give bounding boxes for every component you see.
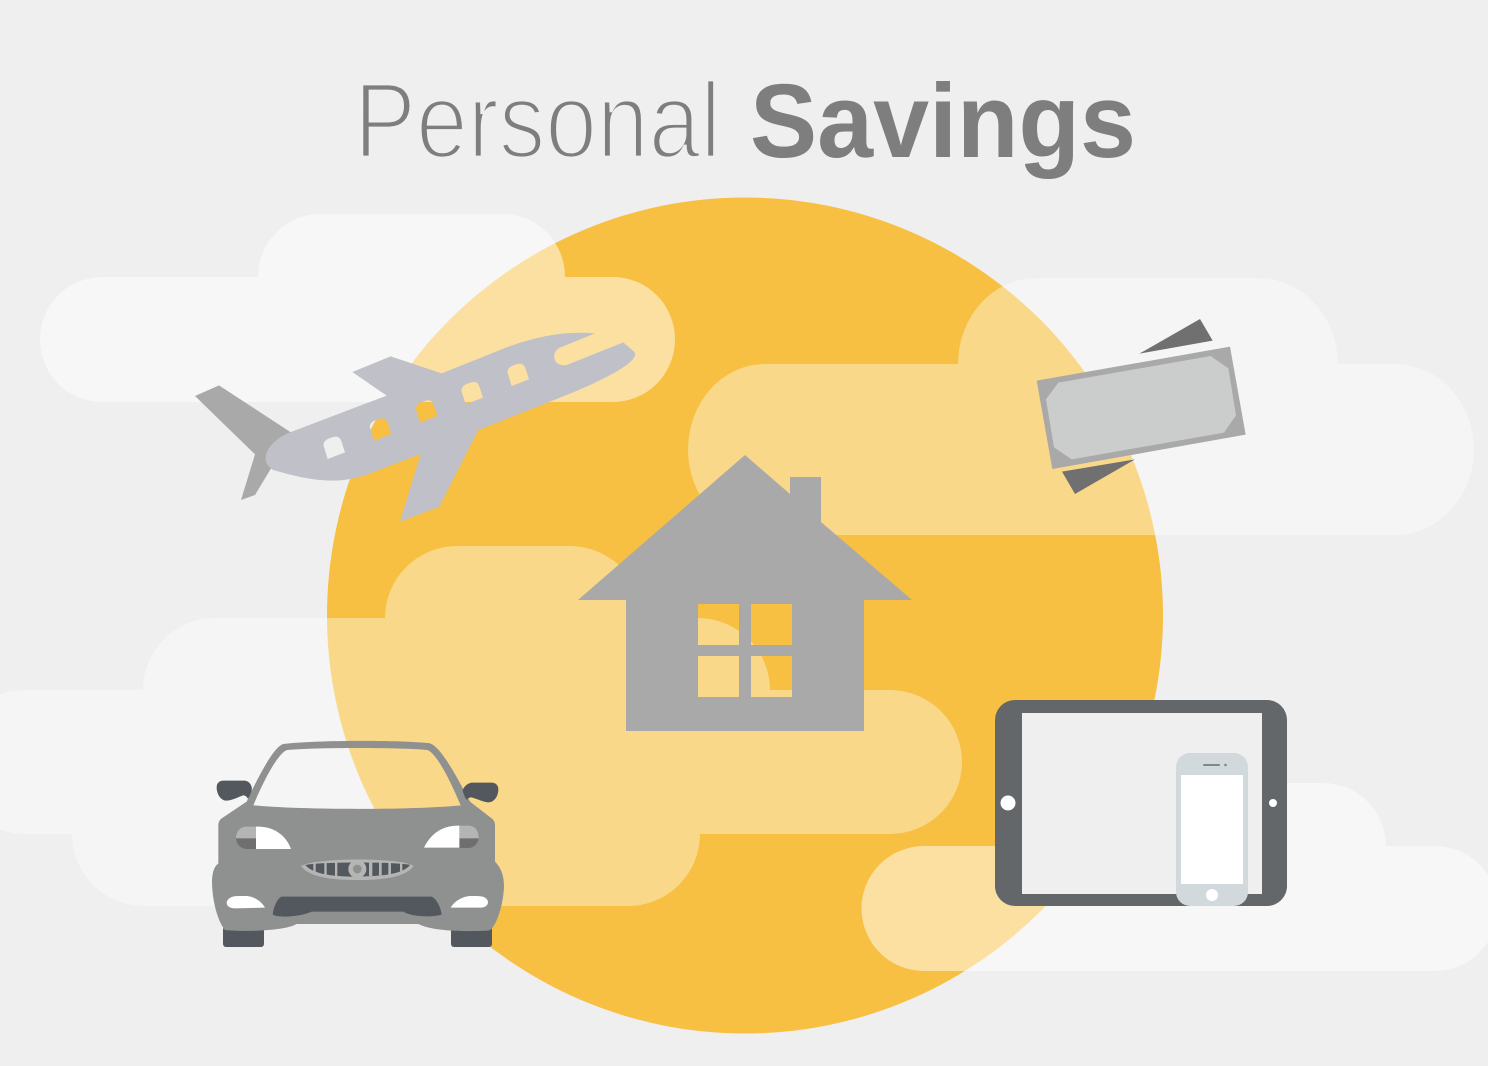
airplane tail [195, 385, 293, 500]
icon: airplane [195, 333, 635, 522]
headlight right [424, 826, 479, 848]
banknote lower triangle [1062, 459, 1135, 494]
phone screen [1181, 775, 1243, 884]
headlight left [236, 827, 291, 849]
sun circle [327, 198, 1163, 1034]
cloud: top left [40, 214, 675, 402]
lower air intake [273, 897, 442, 917]
mirror right [463, 783, 498, 802]
fog lights [227, 896, 488, 908]
icon: house [578, 455, 912, 731]
icon: banknote [1037, 319, 1246, 494]
cloud: lower left [0, 546, 962, 906]
phone home button [1206, 889, 1218, 901]
title: Personal [354, 60, 721, 180]
banknote outer [1037, 347, 1246, 469]
car body [212, 741, 504, 931]
banknote upper triangle [1139, 319, 1213, 354]
grille [301, 859, 414, 880]
cloud: lower right [862, 783, 1488, 971]
tablet camera [1269, 799, 1277, 807]
title [354, 60, 1136, 180]
tablet screen [1022, 713, 1262, 894]
airplane body and wings [266, 333, 635, 522]
wheels [223, 927, 492, 947]
icon: smartphone [1176, 753, 1248, 906]
icon: car [212, 741, 504, 947]
phone front camera [1224, 764, 1227, 766]
phone speaker [1203, 764, 1220, 766]
cloud: right [688, 278, 1474, 535]
tablet home button [1000, 796, 1016, 810]
icon: tablet [995, 700, 1287, 906]
title: Savings [750, 63, 1136, 180]
mirror left [217, 781, 252, 801]
banknote inner [1046, 356, 1236, 459]
